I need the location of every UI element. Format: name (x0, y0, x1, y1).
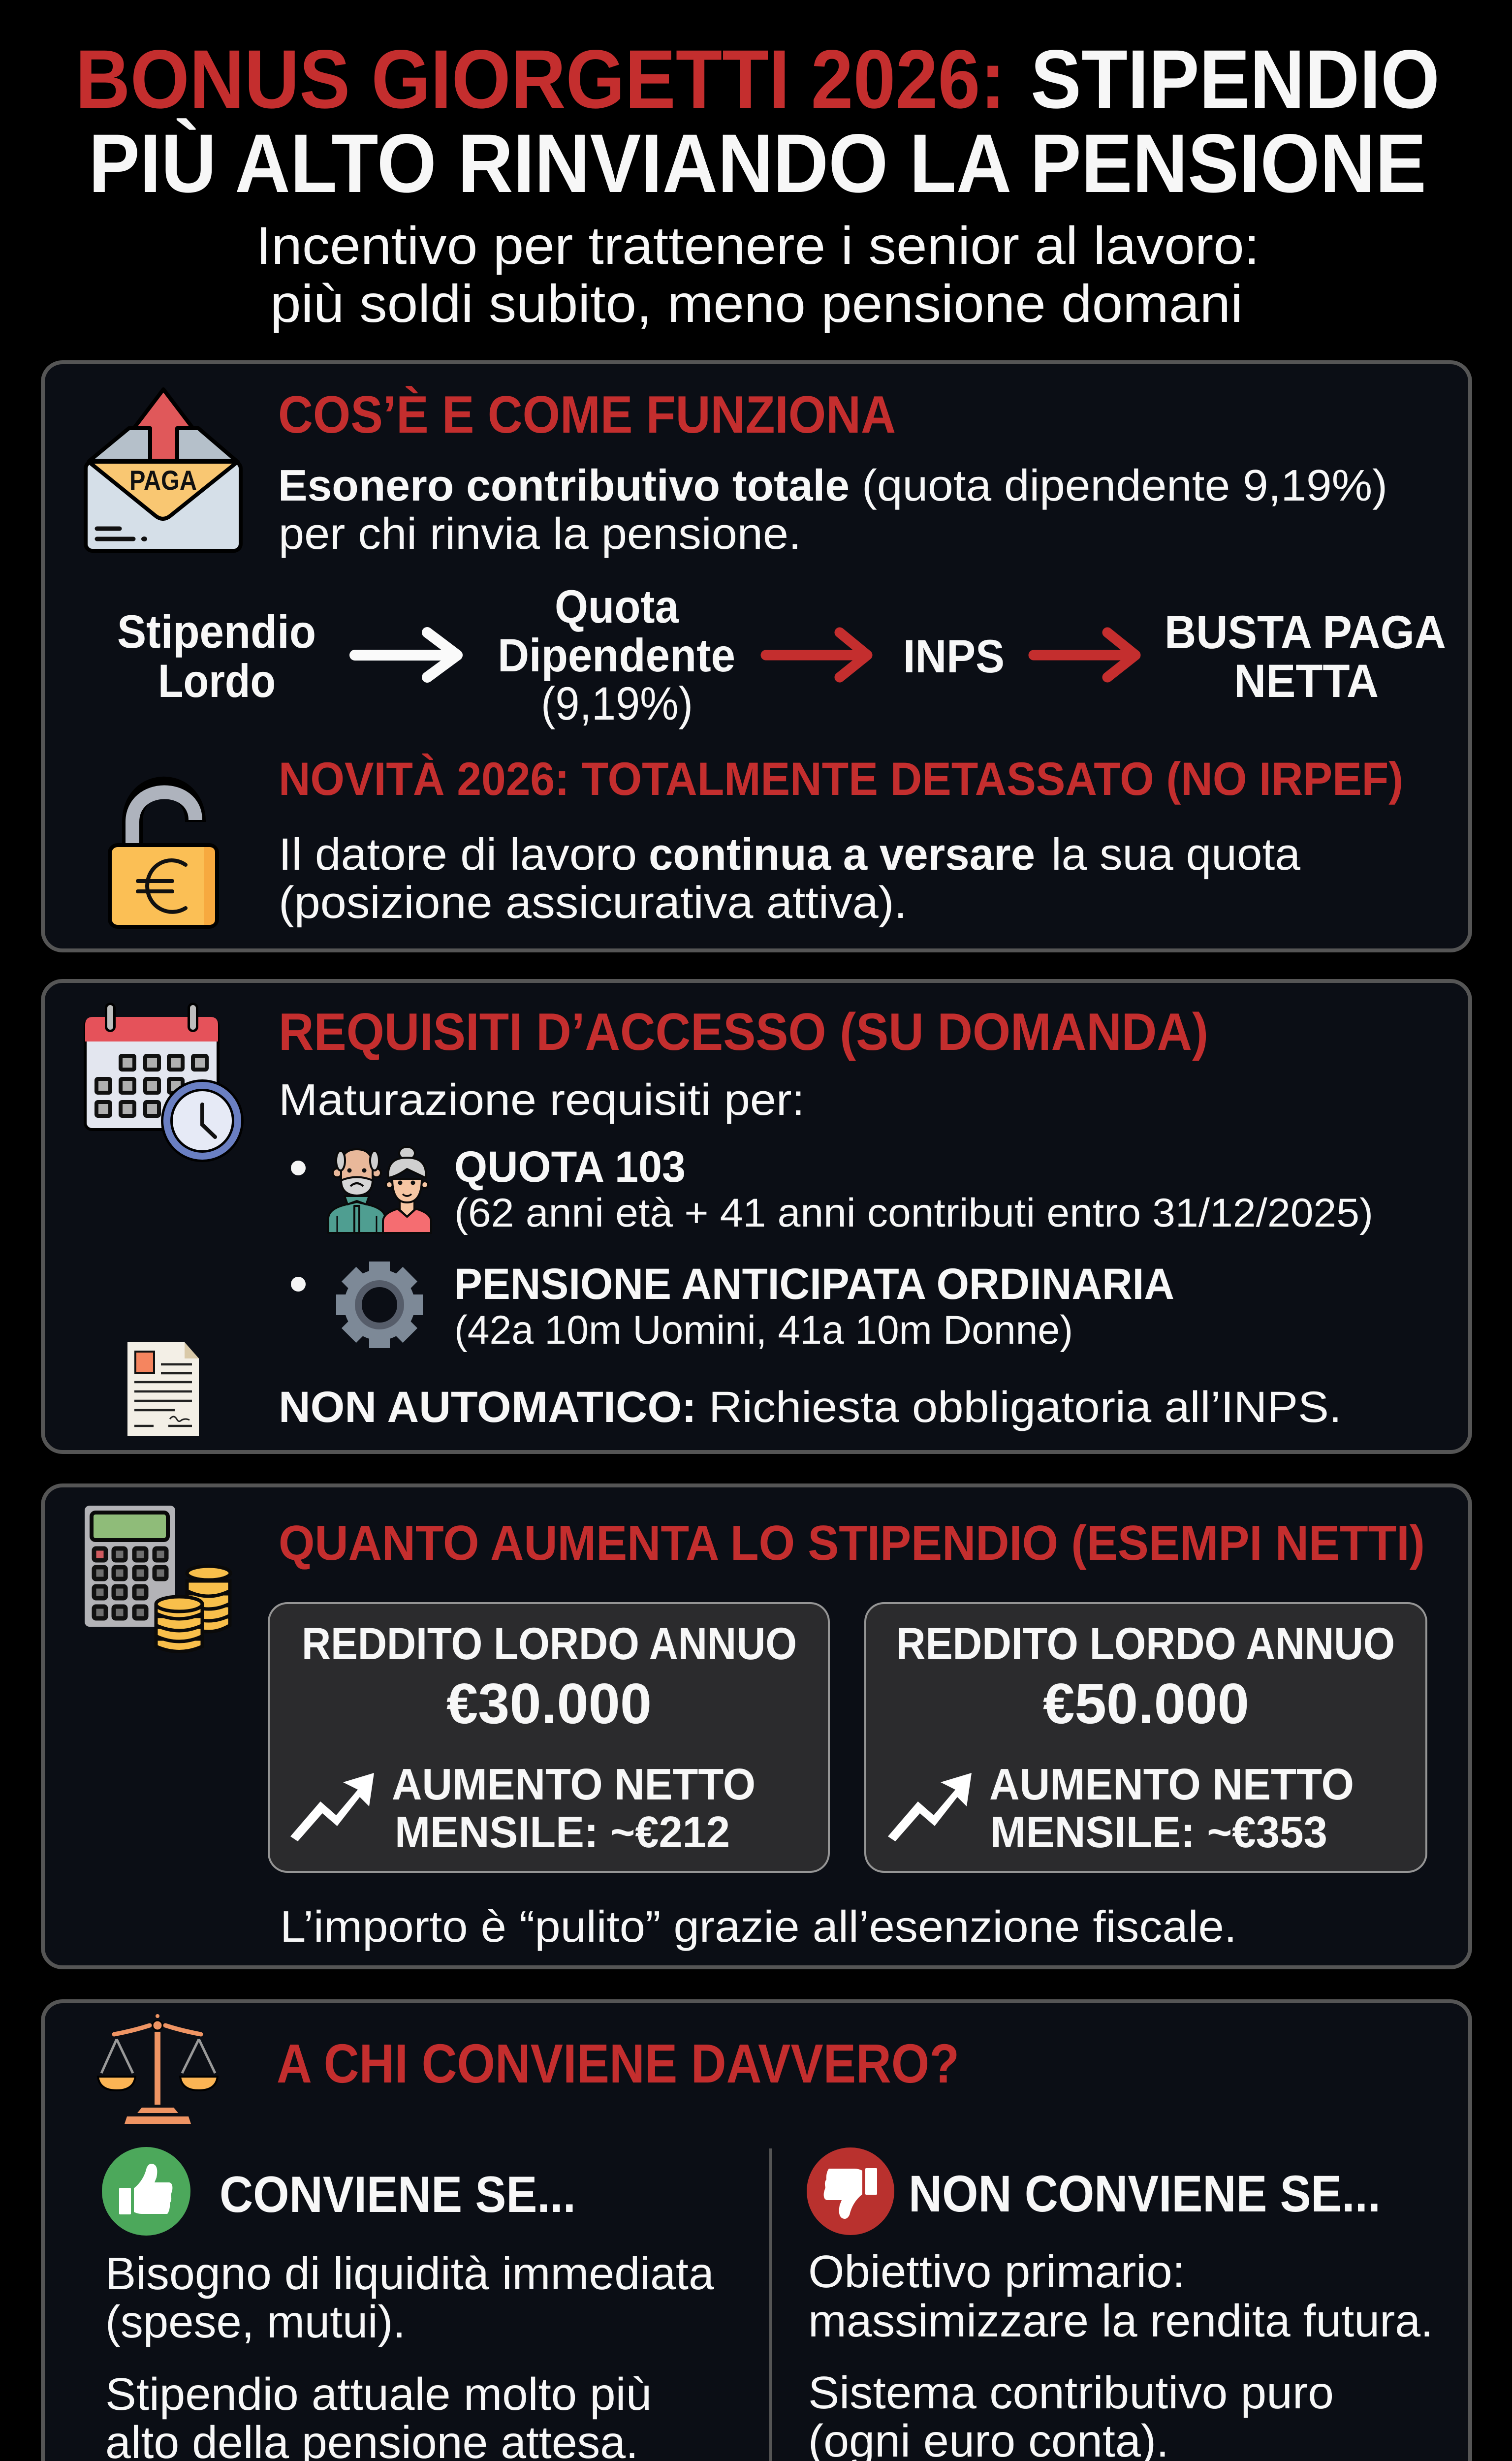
flow step: quota dipendente: Dipendente (498, 630, 735, 682)
icon: document (127, 1342, 199, 1436)
column: non conviene se (808, 2165, 1433, 2461)
heading: COS’È E COME FUNZIONA (278, 385, 896, 444)
heading: A CHI CONVIENE DAVVERO? (277, 2033, 959, 2094)
flow step: inps: INPS (903, 631, 1005, 683)
panel: quanto aumenta lo stipendio (43, 1485, 1470, 1967)
card: 50.000: REDDITO LORDO ANNUO (896, 1619, 1395, 1669)
requirement: pensione anticipata: (42a 10m Uomini, 41a 10m Donne) (454, 1308, 1073, 1353)
bullet (291, 1277, 306, 1292)
title (75, 32, 1440, 210)
flow step: busta paga netta (1165, 606, 1446, 707)
title: STIPENDIO (1031, 32, 1440, 126)
flow step: stipendio lordo (117, 606, 316, 707)
bullet (291, 1161, 306, 1175)
flow step: busta paga netta: BUSTA PAGA (1165, 606, 1446, 659)
column: non conviene se: massimizzare la rendita futura. (808, 2295, 1433, 2346)
card: 30.000: MENSILE: ~€212 (395, 1808, 730, 1857)
subtitle: Incentivo per trattenere i senior al lavoro: (256, 216, 1260, 275)
icon: envelope with payslip: PAGA (129, 465, 197, 496)
description (278, 461, 1387, 559)
icon: envelope with payslip (86, 389, 241, 551)
column: conviene se (105, 2166, 714, 2461)
novità text: la sua quota (1051, 829, 1301, 880)
panel: cos'è e come funziona (43, 362, 1470, 950)
card: 50.000: €50.000 (1043, 1672, 1249, 1735)
column: conviene se: Stipendio attuale molto più (105, 2368, 652, 2420)
arrow: white (355, 632, 457, 677)
note: L’importo è “pulito” grazie all’esenzione fiscale. (280, 1902, 1237, 1952)
panel: requisiti d'accesso (43, 981, 1470, 1452)
title: PIÙ ALTO RINVIANDO LA PENSIONE (89, 117, 1426, 210)
icon: calendar with clock (85, 1008, 238, 1156)
flow step: quota dipendente: Quota (555, 581, 679, 633)
intro text: Maturazione requisiti per: (279, 1075, 805, 1125)
arrow: red 1 (766, 632, 867, 677)
flow step: stipendio lordo: Stipendio (117, 606, 316, 658)
note: non automatico: Richiesta obbligatoria all’INPS. (709, 1382, 1342, 1431)
novità text: continua a versare (649, 829, 1035, 880)
flow step: quota dipendente: (9,19%) (541, 678, 693, 730)
requirement: quota 103 (454, 1142, 1373, 1235)
title: BONUS GIORGETTI 2026: (75, 32, 1006, 126)
column: conviene se: (spese, mutui). (105, 2296, 406, 2347)
requirement: pensione anticipata (454, 1259, 1174, 1353)
card: 30.000 (269, 1603, 829, 1872)
novità text: (posizione assicurativa attiva). (279, 878, 907, 928)
card: 50.000 (865, 1603, 1426, 1872)
novità heading: NOVITÀ 2026: TOTALMENTE DETASSATO (NO IRPEF) (279, 753, 1403, 805)
card: 30.000: €30.000 (446, 1672, 652, 1735)
flow step: stipendio lordo: Lordo (158, 655, 276, 707)
column: non conviene se: Sistema contributivo puro (808, 2367, 1334, 2418)
divider (769, 2148, 772, 2461)
column: non conviene se: NON CONVIENE SE... (909, 2165, 1381, 2223)
note: non automatico (279, 1382, 1342, 1431)
description: per chi rinvia la pensione. (279, 509, 801, 559)
heading: QUANTO AUMENTA LO STIPENDIO (ESEMPI NETTI) (279, 1515, 1425, 1571)
arrow: red 2 (1034, 632, 1135, 677)
card: 30.000: REDDITO LORDO ANNUO (302, 1619, 797, 1669)
note: non automatico: NON AUTOMATICO: (279, 1382, 696, 1431)
icon: gear (336, 1262, 423, 1348)
icon: trend arrow (290, 1773, 374, 1841)
flow step: busta paga netta: NETTA (1234, 655, 1379, 707)
icon: trend arrow (888, 1773, 972, 1841)
card: 30.000: AUMENTO NETTO (392, 1760, 756, 1809)
icon: senior couple (328, 1147, 431, 1233)
requirement: quota 103: (62 anni età + 41 anni contributi entro 31/12/2025) (454, 1191, 1373, 1235)
card: 50.000: AUMENTO NETTO (989, 1760, 1354, 1809)
icon: thumbs up (102, 2147, 190, 2236)
card: 50.000: MENSILE: ~€353 (990, 1808, 1327, 1857)
description: Esonero contributivo totale (278, 461, 850, 510)
heading: REQUISITI D’ACCESSO (SU DOMANDA) (279, 1002, 1208, 1061)
novità text: Il datore di lavoro (279, 829, 637, 880)
flow step: quota dipendente (498, 581, 735, 730)
description: (quota dipendente 9,19%) (862, 461, 1387, 510)
column: non conviene se: Obiettivo primario: (808, 2246, 1185, 2297)
subtitle: più soldi subito, meno pensione domani (270, 274, 1243, 333)
icon: open padlock (110, 787, 217, 927)
icon: scales (98, 2014, 218, 2124)
column: conviene se: Bisogno di liquidità immediata (105, 2248, 714, 2299)
panel: a chi conviene davvero (43, 2001, 1470, 2461)
requirement: quota 103: QUOTA 103 (454, 1142, 686, 1191)
column: conviene se: CONVIENE SE... (220, 2166, 576, 2223)
icon: thumbs down (807, 2147, 894, 2235)
icon: calculator and coins (85, 1506, 230, 1652)
requirement: pensione anticipata: PENSIONE ANTICIPATA ORDINARIA (454, 1259, 1174, 1308)
subtitle (256, 216, 1260, 333)
novità text (279, 829, 1301, 928)
